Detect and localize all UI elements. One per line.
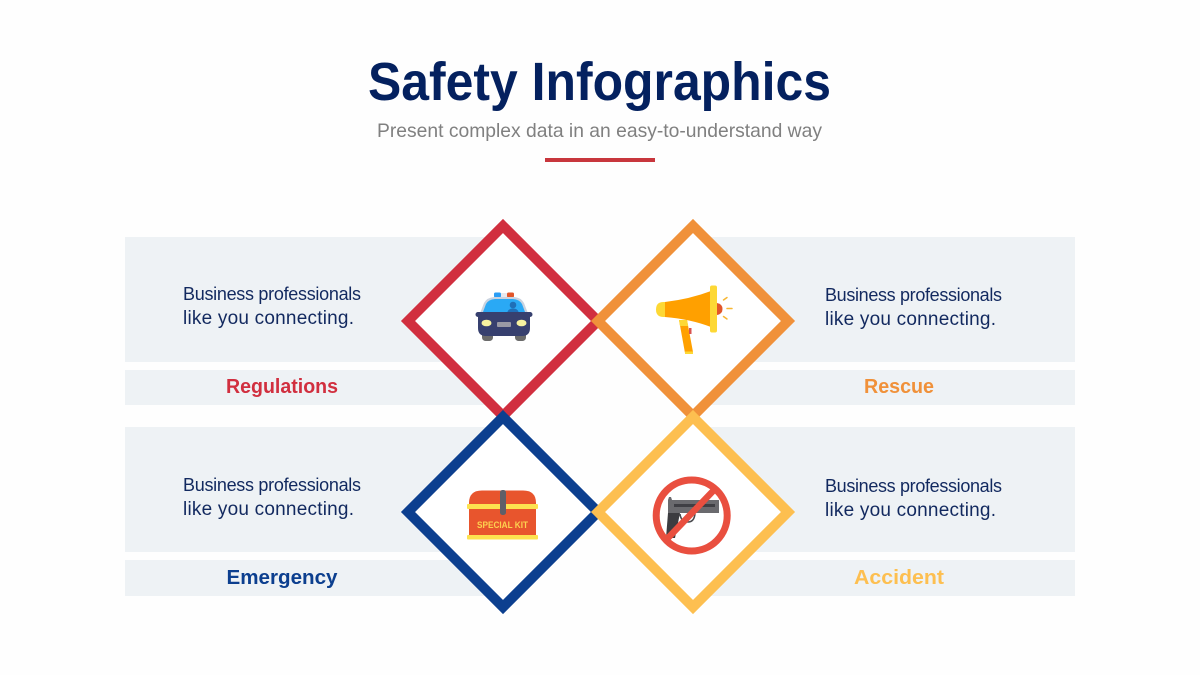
label: emergency: Emergency <box>226 567 338 589</box>
text: emergency description: like you connecting. <box>183 499 354 520</box>
diamond: regulations <box>408 226 598 416</box>
label: rescue: Rescue <box>864 376 934 398</box>
diamond: accident <box>598 417 788 607</box>
panel: accident band <box>693 427 1075 596</box>
text: regulations description: Business professionals <box>183 284 361 304</box>
icon: special kit chest: SPECIAL KIT <box>477 520 528 531</box>
text: regulations description: like you connecting. <box>183 308 354 329</box>
icon: megaphone <box>656 286 732 354</box>
icon: police car <box>476 292 532 341</box>
title: Safety Infographics <box>368 52 831 112</box>
label: regulations: Regulations <box>226 376 338 398</box>
panel: rescue band <box>693 237 1075 405</box>
text: rescue description: like you connecting. <box>825 309 996 330</box>
icon: special kit chest <box>467 490 538 540</box>
panel: regulations band <box>125 237 503 405</box>
title underline <box>545 158 655 162</box>
icon: no guns sign <box>656 480 727 551</box>
text: accident description: Business professionals <box>825 476 1002 496</box>
panel: emergency band <box>125 427 503 596</box>
subtitle: Present complex data in an easy-to-understand way <box>377 120 822 142</box>
text: accident description: like you connecting. <box>825 500 996 521</box>
text: rescue description: Business professionals <box>825 285 1002 305</box>
diamond: emergency <box>408 417 598 607</box>
diamond: rescue <box>598 226 788 416</box>
label: accident: Accident <box>854 567 944 589</box>
text: emergency description: Business professionals <box>183 475 361 495</box>
